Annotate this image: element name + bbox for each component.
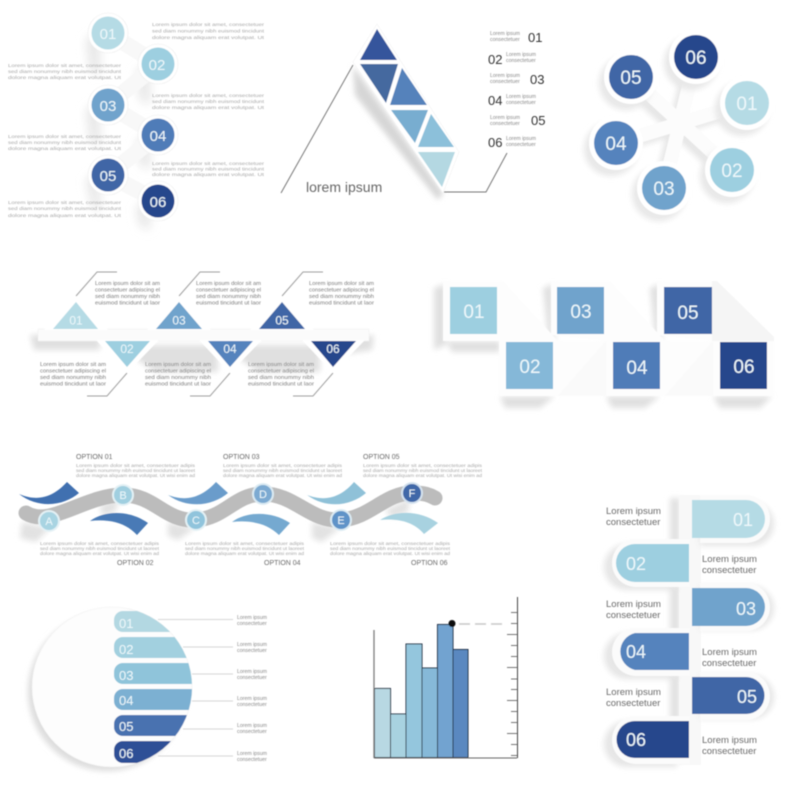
circle 05 <box>88 155 128 195</box>
marker A: A <box>45 516 53 528</box>
timeline text blocks: euismod tincidunt ut laor <box>248 382 314 388</box>
option 02 <box>40 541 160 567</box>
white disc <box>32 607 192 767</box>
text block 03: dolore magna aliquam erat volutpat. Ut <box>152 105 265 110</box>
tab labels: consectetuer <box>702 565 756 576</box>
tab labels: Lorem ipsum <box>702 554 757 565</box>
bar shadows <box>30 335 374 372</box>
circle 04: 04 <box>150 128 166 145</box>
bar numbers <box>119 616 133 761</box>
tab 01: 01 <box>733 510 753 530</box>
circle 05 <box>604 50 658 104</box>
tab labels: Lorem ipsum <box>702 735 757 746</box>
timeline text blocks: Lorem ipsum dolor sit am <box>196 281 261 287</box>
tab 02 <box>616 544 689 582</box>
label list: 05 <box>531 113 545 128</box>
peak marker <box>448 620 456 627</box>
timeline text blocks <box>40 281 374 388</box>
bar numbers: 01 <box>119 616 133 631</box>
triangle 02 <box>105 341 150 367</box>
bars <box>374 624 468 758</box>
text block 01: sed diam nonummy nibh euismod tincidunt <box>152 28 265 34</box>
tab 03: 03 <box>736 599 756 619</box>
tab labels <box>606 506 757 757</box>
leaf 6 <box>380 513 438 534</box>
tab labels: Lorem ipsum <box>702 647 757 658</box>
option 03: dolore magna aliquam erat volutpat. Ut wisi enim ad <box>223 473 343 478</box>
text block 04: sed diam nonummy nibh euismod tincidunt <box>8 140 122 145</box>
marker F: F <box>409 488 416 500</box>
timeline text blocks: euismod tincidunt ut laor <box>145 382 211 388</box>
heading: lorem ipsum: lorem ipsum <box>306 179 382 195</box>
text block 01: dolore magna aliquam erat volutpat. Ut <box>152 35 265 40</box>
text block 05: sed diam nonummy nibh euismod tincidunt <box>152 166 265 172</box>
leaf 5 <box>307 482 366 504</box>
triangle 01 <box>53 302 98 329</box>
left leader line <box>281 65 353 193</box>
leaf 1 <box>19 482 79 504</box>
timeline text blocks: consectetuer adipiscing el <box>145 368 211 374</box>
square 06 <box>720 342 767 389</box>
tab halo shadows <box>604 502 774 767</box>
strip shadow <box>353 66 443 200</box>
label list: consectetuer <box>490 121 520 127</box>
bar numbers: 04 <box>119 693 133 708</box>
timeline text blocks: consectetuer adipiscing el <box>248 368 314 374</box>
tab 01 <box>692 500 765 538</box>
option 01: OPTION 01 <box>76 454 113 461</box>
tab labels: consectetuer <box>606 698 660 709</box>
timeline text blocks: sed diam nonummy nibh <box>309 294 374 300</box>
tab labels: Lorem ipsum <box>606 506 661 517</box>
text block 02: sed diam nonummy nibh euismod tincidunt <box>8 69 122 74</box>
bar numbers: 02 <box>119 642 133 657</box>
timeline text blocks: Lorem ipsum dolor sit am <box>309 281 374 287</box>
tab halos <box>612 495 770 764</box>
label list: consectetuer <box>506 58 536 64</box>
option 03: sed diam nonummy nibh euismod tincidunt ut laoreet <box>223 468 343 473</box>
leaf 3 <box>168 482 228 504</box>
circle 06: 06 <box>150 194 166 211</box>
marker C <box>185 509 207 531</box>
disc shadow <box>28 613 186 771</box>
timeline text blocks: sed diam nonummy nibh <box>145 375 211 381</box>
circle 02: 02 <box>149 57 165 74</box>
bottom axis <box>374 757 517 759</box>
dashed guide line <box>459 623 503 625</box>
option 04: Lorem ipsum dolor sit amet, consectetuer adipis <box>185 541 305 546</box>
text block 05 <box>152 161 265 177</box>
label list: consectetuer <box>490 37 520 43</box>
text block 06: sed diam nonummy nibh euismod tincidunt <box>8 206 122 211</box>
circle 01 <box>720 76 774 130</box>
triangle 03 <box>156 302 202 329</box>
triangle 02: 02 <box>120 342 134 356</box>
triangle 05 <box>259 302 305 329</box>
disc labels: Lorem ipsum <box>237 615 267 621</box>
panel: six-spoke circles <box>584 30 774 221</box>
timeline text blocks: consectetuer adipiscing el <box>95 288 160 294</box>
option 04 <box>185 541 305 567</box>
timeline text blocks: sed diam nonummy nibh <box>196 294 261 300</box>
circle 02 <box>138 44 178 84</box>
disc labels: consectetuer <box>237 757 267 763</box>
disc labels: consectetuer <box>237 702 267 708</box>
wave shadows <box>20 498 410 542</box>
tab 05 <box>692 677 764 714</box>
tab labels: consectetuer <box>606 610 660 621</box>
square 04 <box>613 342 660 389</box>
timeline text blocks: consectetuer adipiscing el <box>196 288 261 294</box>
triangle 06: 06 <box>326 342 340 356</box>
disc labels: consectetuer <box>237 621 267 627</box>
timeline text blocks: euismod tincidunt ut laor <box>95 300 160 306</box>
square 04: 04 <box>626 358 648 379</box>
disc labels: Lorem ipsum <box>237 696 267 702</box>
top-right fold <box>712 281 774 341</box>
option 04: sed diam nonummy nibh euismod tincidunt ut laoreet <box>185 546 305 551</box>
tab labels: consectetuer <box>702 746 756 757</box>
paper sheet <box>443 281 774 396</box>
panel: triangle timeline <box>30 272 374 396</box>
text block 05: dolore magna aliquam erat volutpat. Ut <box>152 172 265 177</box>
triangle halos <box>44 296 365 373</box>
triangle 05: 05 <box>275 314 289 328</box>
option 02: OPTION 02 <box>117 560 154 567</box>
square 02: 02 <box>519 357 541 378</box>
option 06: dolore magna aliquam erat volutpat. Ut wisi enim ad <box>330 551 451 556</box>
label list: 01 <box>528 30 542 45</box>
timeline text blocks: sed diam nonummy nibh <box>40 375 106 381</box>
option 01: sed diam nonummy nibh euismod tincidunt ut laoreet <box>76 468 196 473</box>
marker F <box>401 482 423 504</box>
fold shading <box>558 341 713 396</box>
square 01: 01 <box>463 302 485 323</box>
tab 06 <box>616 721 689 758</box>
circle 01: 01 <box>100 26 116 43</box>
triangle 04: 04 <box>223 342 237 356</box>
circle 06 <box>138 181 178 221</box>
square 05 <box>664 287 712 334</box>
bar numbers: 03 <box>119 668 133 683</box>
tab 06: 06 <box>626 730 646 750</box>
zigzag connector <box>108 33 158 201</box>
label list: consectetuer <box>506 142 536 148</box>
option 05: OPTION 05 <box>363 454 400 461</box>
marker E <box>330 509 352 531</box>
disc labels: consectetuer <box>237 648 267 654</box>
text block 04 <box>8 134 122 151</box>
option 05 <box>363 454 483 478</box>
disc labels: Lorem ipsum <box>237 751 267 757</box>
square 02 <box>506 342 553 389</box>
stem shadow <box>670 498 680 760</box>
label list: 02 <box>488 52 502 67</box>
disc labels <box>237 615 267 763</box>
text block 04: Lorem ipsum dolor sit amet, consectetuer <box>8 134 122 139</box>
option 01: Lorem ipsum dolor sit amet, consectetuer adipis <box>76 463 196 468</box>
circle 06 <box>669 30 723 84</box>
tab labels: Lorem ipsum <box>606 687 661 698</box>
circle 06: 06 <box>685 48 707 69</box>
disc labels: consectetuer <box>237 729 267 735</box>
timeline text blocks: euismod tincidunt ut laor <box>196 300 261 306</box>
circle 04: 04 <box>605 134 627 155</box>
label list: consectetuer <box>506 100 536 106</box>
right leader line <box>444 153 507 192</box>
timeline text blocks: euismod tincidunt ut laor <box>309 300 374 306</box>
disc labels: Lorem ipsum <box>237 669 267 675</box>
option 06 <box>330 541 451 567</box>
timeline text blocks: sed diam nonummy nibh <box>248 375 314 381</box>
marker D <box>252 483 274 505</box>
leader lines <box>158 620 233 756</box>
option 02: sed diam nonummy nibh euismod tincidunt ut laoreet <box>40 546 160 551</box>
right axis with ticks <box>507 597 518 758</box>
tab labels: Lorem ipsum <box>606 599 661 610</box>
text block 05: Lorem ipsum dolor sit amet, consectetuer <box>152 161 265 166</box>
option 06: Lorem ipsum dolor sit amet, consectetuer adipis <box>330 541 451 546</box>
marker D: D <box>259 489 267 501</box>
label list: Lorem ipsum <box>490 31 520 37</box>
option 04: dolore magna aliquam erat volutpat. Ut wisi enim ad <box>185 551 305 556</box>
option 03 <box>223 454 343 478</box>
circle 03 <box>88 85 128 125</box>
option 05: dolore magna aliquam erat volutpat. Ut wisi enim ad <box>363 473 483 478</box>
circle 04 <box>138 115 178 155</box>
text block 06 <box>8 200 122 218</box>
leaf 4 <box>232 514 290 535</box>
text block 06: dolore magna aliquam erat volutpat. Ut <box>8 213 122 218</box>
option 02: dolore magna aliquam erat volutpat. Ut wisi enim ad <box>40 551 160 556</box>
option 05: Lorem ipsum dolor sit amet, consectetuer adipis <box>363 463 483 468</box>
option 04: OPTION 04 <box>264 560 301 567</box>
text block 02: Lorem ipsum dolor sit amet, consectetuer <box>8 63 122 68</box>
text block 03: Lorem ipsum dolor sit amet, consectetuer <box>152 93 265 98</box>
panel: alternating tabs <box>604 495 774 767</box>
option 06: sed diam nonummy nibh euismod tincidunt ut laoreet <box>330 546 451 551</box>
leaf 2 <box>90 513 148 535</box>
marker B <box>112 484 134 506</box>
triangle 06 <box>311 341 356 367</box>
circle 05: 05 <box>100 168 116 185</box>
tab labels: consectetuer <box>702 658 756 669</box>
tab 04: 04 <box>626 642 646 662</box>
square 01 <box>450 287 497 334</box>
disc bars <box>113 610 192 764</box>
circle shadows <box>584 36 769 221</box>
white stem <box>679 495 701 765</box>
text block 03 <box>152 93 265 110</box>
disc labels: Lorem ipsum <box>237 642 267 648</box>
spoke shadows <box>610 63 741 194</box>
label list: Lorem ipsum <box>490 73 520 79</box>
tab 04 <box>620 633 689 670</box>
tab 03 <box>692 588 765 626</box>
panel: triangle strip <box>281 24 545 200</box>
timeline text blocks: euismod tincidunt ut laor <box>40 382 106 388</box>
connector shadows <box>86 30 150 230</box>
option 01: dolore magna aliquam erat volutpat. Ut wisi enim ad <box>76 473 196 478</box>
white strip <box>353 24 459 193</box>
text block 01 <box>152 22 265 40</box>
circle 02: 02 <box>721 161 743 182</box>
tab 05: 05 <box>737 687 757 707</box>
text block 02 <box>8 63 122 80</box>
square 03 <box>557 287 604 334</box>
text block 01: Lorem ipsum dolor sit amet, consectetuer <box>152 22 265 27</box>
circle 03: 03 <box>100 98 116 115</box>
label list: Lorem ipsum <box>506 136 536 142</box>
option 02: Lorem ipsum dolor sit amet, consectetuer adipis <box>40 541 160 546</box>
timeline text blocks: sed diam nonummy nibh <box>95 294 160 300</box>
white spokes <box>616 57 747 188</box>
circle 03 <box>637 161 691 215</box>
marker C: C <box>192 515 200 527</box>
option 03: Lorem ipsum dolor sit amet, consectetuer adipis <box>223 463 343 468</box>
bar numbers: 05 <box>119 719 133 734</box>
circle 04 <box>589 116 643 170</box>
label list: Lorem ipsum <box>506 52 536 58</box>
panel: disc list <box>28 607 267 771</box>
circle 05: 05 <box>620 68 642 89</box>
option 06: OPTION 06 <box>411 560 448 567</box>
leader lines <box>76 272 333 396</box>
text block 03: sed diam nonummy nibh euismod tincidunt <box>152 99 265 104</box>
bar numbers: 06 <box>119 746 133 761</box>
timeline text blocks: Lorem ipsum dolor sit am <box>40 362 106 368</box>
text block 04: dolore magna aliquam erat volutpat. Ut <box>8 146 122 151</box>
label list: 04 <box>488 93 502 108</box>
text block 02: dolore magna aliquam erat volutpat. Ut <box>8 75 122 80</box>
square 06: 06 <box>733 357 755 378</box>
disc labels: Lorem ipsum <box>237 723 267 729</box>
timeline text blocks: Lorem ipsum dolor sit am <box>95 281 160 287</box>
label list: 03 <box>530 72 544 87</box>
left axis <box>373 630 375 758</box>
triangle 01: 01 <box>69 314 83 328</box>
label list <box>488 30 545 150</box>
timeline text blocks: consectetuer adipiscing el <box>40 368 106 374</box>
disc labels: consectetuer <box>237 675 267 681</box>
option 03: OPTION 03 <box>223 454 260 461</box>
label list: consectetuer <box>490 79 520 85</box>
timeline text blocks: Lorem ipsum dolor sit am <box>248 362 314 368</box>
circle 02 <box>705 143 759 197</box>
square 03: 03 <box>570 302 592 323</box>
triangles <box>360 29 455 187</box>
option 01 <box>76 454 196 478</box>
tab labels: consectetuer <box>606 517 660 528</box>
paper shadows <box>434 284 772 408</box>
marker A <box>38 510 60 532</box>
circle 01: 01 <box>736 94 758 115</box>
triangle 03: 03 <box>172 314 186 328</box>
square 05: 05 <box>677 303 699 324</box>
tab 02: 02 <box>626 554 646 574</box>
label list: Lorem ipsum <box>506 94 536 100</box>
white bar <box>38 329 369 341</box>
panel: wave options <box>19 454 483 567</box>
circle 01 <box>88 13 128 53</box>
panel: bar chart <box>374 597 518 758</box>
grey wave band <box>26 493 435 520</box>
timeline text blocks: consectetuer adipiscing el <box>309 288 374 294</box>
panel: numbered zigzag circles <box>8 13 265 230</box>
label list: Lorem ipsum <box>490 115 520 121</box>
circle 03: 03 <box>653 179 675 200</box>
triangle 04 <box>208 341 253 367</box>
text block 06: Lorem ipsum dolor sit amet, consectetuer <box>8 200 122 205</box>
timeline text blocks: Lorem ipsum dolor sit am <box>145 362 211 368</box>
marker B: B <box>119 490 127 502</box>
option 05: sed diam nonummy nibh euismod tincidunt ut laoreet <box>363 468 483 473</box>
label list: 06 <box>488 135 502 150</box>
panel: folded squares <box>434 281 774 408</box>
marker E: E <box>337 515 345 527</box>
